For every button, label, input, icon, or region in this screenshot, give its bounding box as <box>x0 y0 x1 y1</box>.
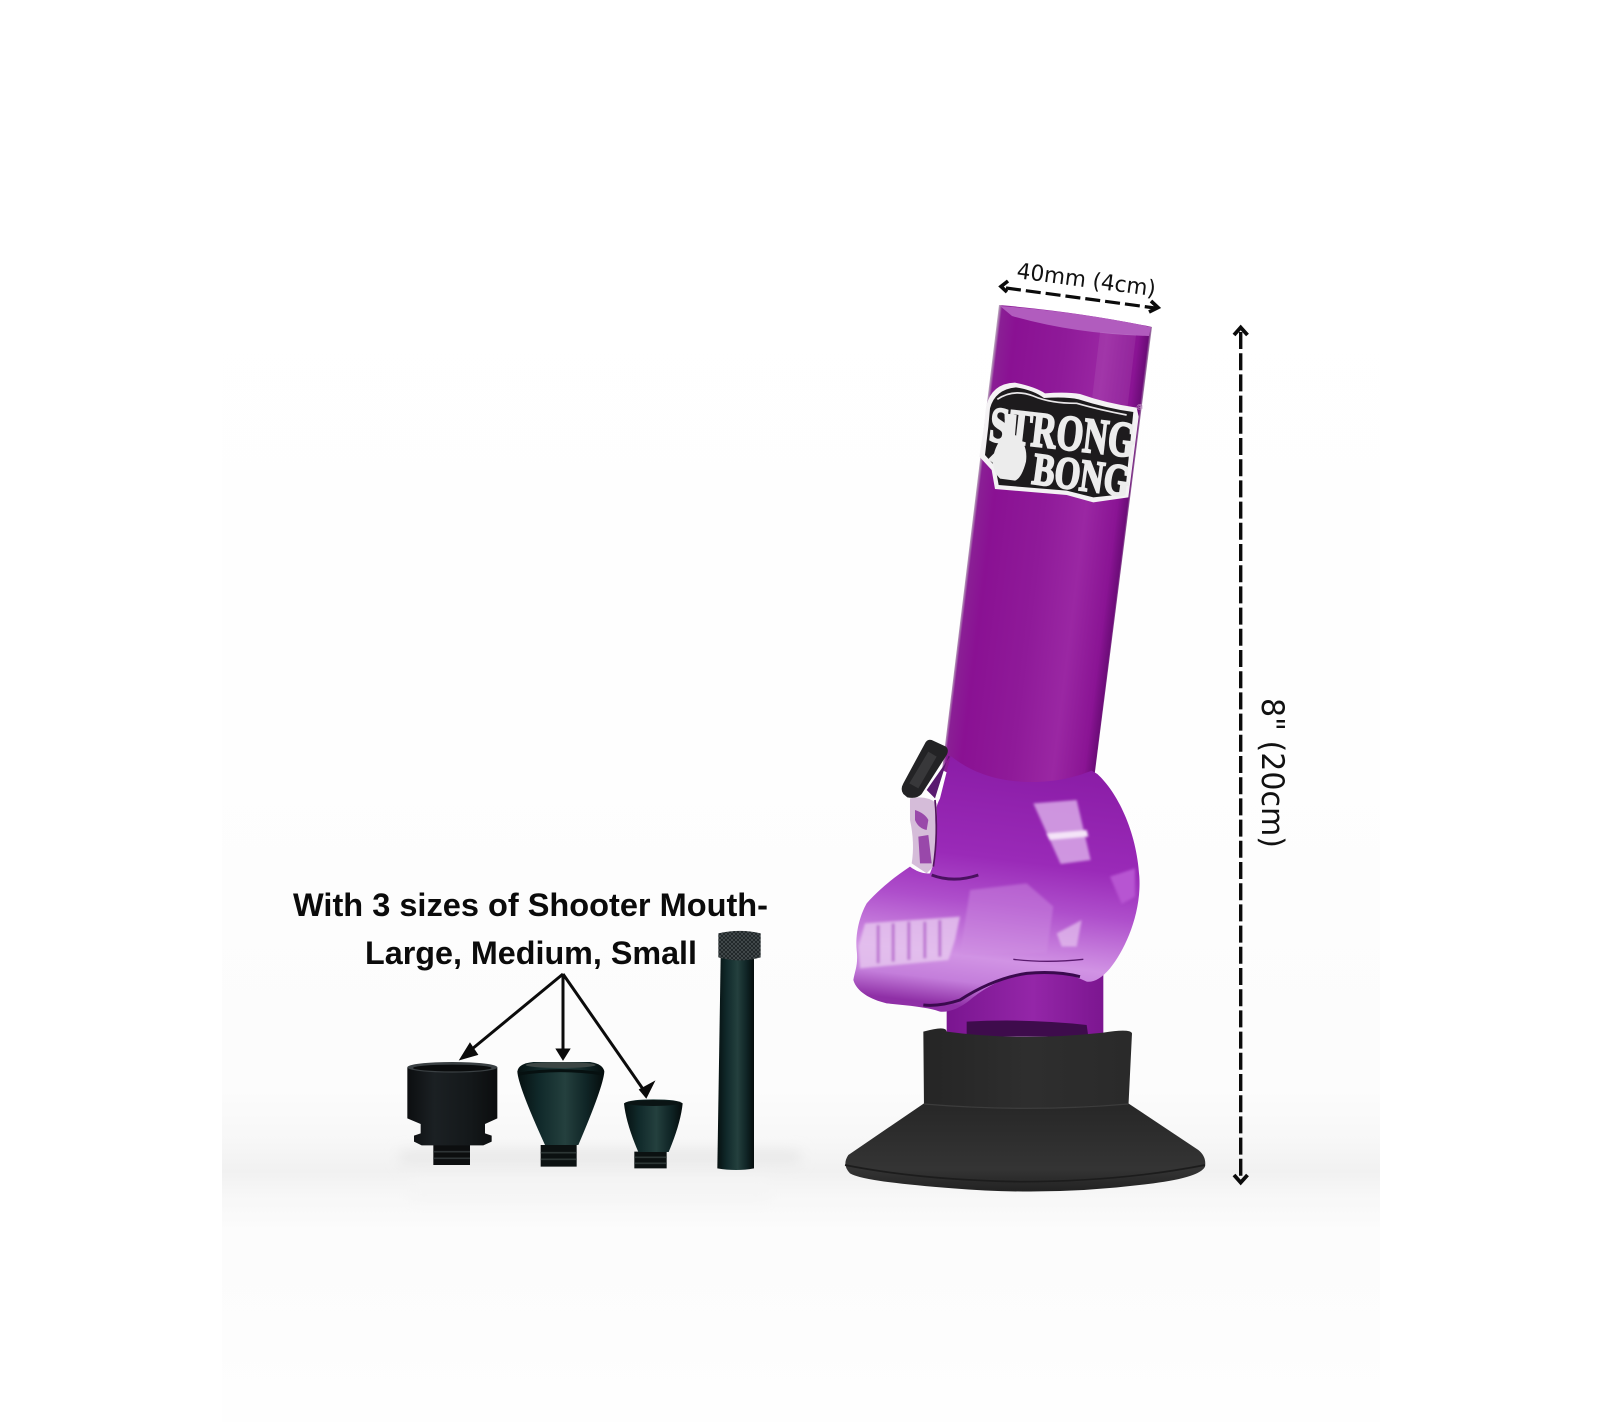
accessories <box>407 931 761 1170</box>
large shooter mouth <box>407 1062 497 1165</box>
eye socket ridge <box>932 875 978 879</box>
floor shadows under accessories <box>400 1152 800 1202</box>
base collar <box>923 1028 1132 1108</box>
tube reflection <box>1090 332 1136 420</box>
sticker black field <box>985 387 1133 497</box>
jaw shadow line <box>923 973 1080 1005</box>
width dimension arrow <box>1001 281 1158 312</box>
tube opening <box>1000 306 1151 336</box>
down stem tube <box>717 931 761 1170</box>
caption: shooter mouth sizes: Large, Medium, Small <box>365 935 697 971</box>
sticker white outline <box>979 383 1139 502</box>
wordmark: BONG <box>1030 444 1133 506</box>
width label: 40mm (4cm) <box>1015 259 1157 302</box>
caption: shooter mouth sizes: With 3 sizes of Shooter Mouth- <box>293 887 768 923</box>
rubber grommet <box>902 740 950 798</box>
arrows to shooter mouths <box>462 974 652 1096</box>
bottle graphic <box>988 413 1026 481</box>
small shooter mouth <box>624 1099 683 1168</box>
caption: shooter mouth sizes <box>293 887 768 971</box>
skull window highlight <box>1033 800 1091 864</box>
neck above base <box>947 967 1103 1037</box>
Strong Bong logo sticker <box>979 383 1144 506</box>
base flange <box>845 1103 1205 1192</box>
nose bridge <box>910 797 937 873</box>
back of skull highlight <box>1110 868 1135 904</box>
rubber suction base <box>845 1028 1205 1192</box>
bong tube <box>942 305 1152 799</box>
height dimension arrow <box>1234 328 1248 1182</box>
height label: 8" (20cm) <box>1254 698 1290 848</box>
medium shooter mouth <box>517 1062 604 1167</box>
teeth <box>858 917 960 968</box>
tube body <box>942 305 1152 799</box>
wordmark <box>987 396 1138 506</box>
cheek highlight <box>960 883 1053 953</box>
wordmark: STRONG <box>987 396 1138 468</box>
skull base of bong <box>853 740 1140 1037</box>
sticker wave line <box>997 393 1127 415</box>
skull body <box>853 756 1140 1012</box>
registered mark: ® <box>1137 402 1144 412</box>
